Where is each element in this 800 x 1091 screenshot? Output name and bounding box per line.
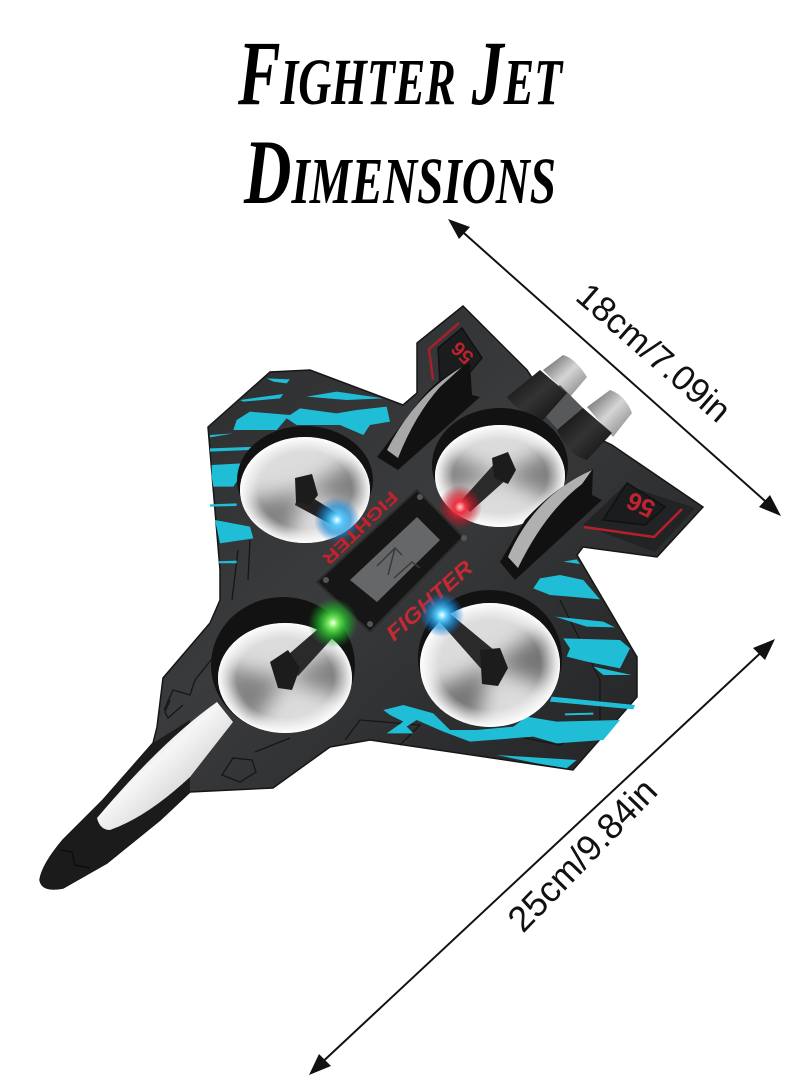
propeller: top right xyxy=(435,425,565,528)
LED: green xyxy=(308,598,358,648)
propeller wells xyxy=(211,408,568,733)
jet body xyxy=(40,306,703,889)
title: DIMENSIONS xyxy=(243,121,556,223)
tail fin right: 56 xyxy=(622,486,660,523)
title xyxy=(237,22,564,223)
arrow: width dimension xyxy=(448,219,781,516)
panel lines xyxy=(164,540,600,782)
propeller: bottom right xyxy=(420,603,560,727)
air intake right xyxy=(500,469,602,580)
nose detail xyxy=(60,850,90,868)
fighter jet toy xyxy=(40,306,703,889)
engines xyxy=(507,355,632,460)
propeller: bottom left xyxy=(218,623,352,733)
teal camouflage: lower wing xyxy=(383,559,635,768)
arrow: length dimension xyxy=(309,639,775,1075)
propeller: top left xyxy=(240,437,370,543)
cockpit panel xyxy=(317,490,467,632)
teal camouflage: upper wing xyxy=(210,378,390,563)
LED: blue xyxy=(420,593,464,637)
tail fin top: 56 xyxy=(447,337,479,368)
fighter label upper: FIGHTER xyxy=(318,487,401,568)
label: width: 18cm/7.09in xyxy=(569,276,738,430)
tail fin right xyxy=(583,483,695,552)
nose dark underside xyxy=(40,720,190,889)
air intake left xyxy=(377,363,480,470)
title: FIGHTER JET xyxy=(237,22,564,124)
nose stripe xyxy=(97,702,233,830)
label: length: 25cm/9.84in xyxy=(499,770,665,940)
tail fin top xyxy=(429,323,482,385)
fighter label lower: FIGHTER xyxy=(382,556,478,646)
